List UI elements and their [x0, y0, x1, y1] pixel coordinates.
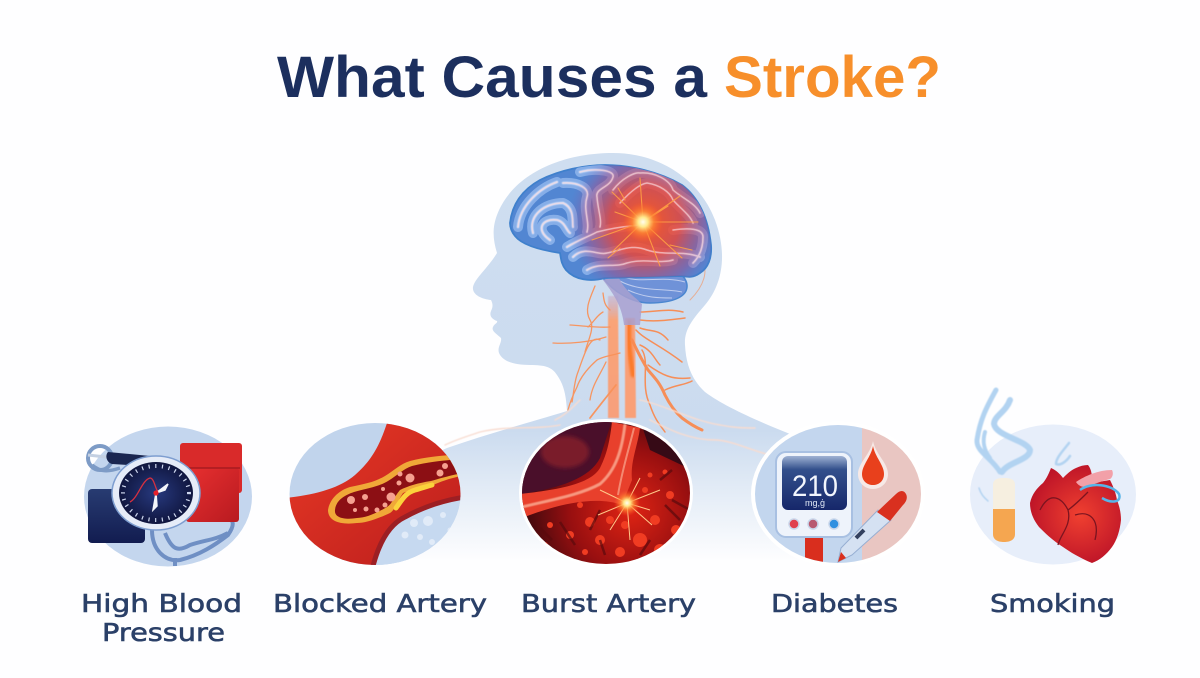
panel: burst artery — [519, 419, 693, 567]
lower blue area with bubbles — [372, 497, 465, 570]
label: smoking: Smoking — [990, 589, 1115, 618]
debris — [542, 470, 681, 557]
blood drop — [858, 441, 888, 489]
cerebrum — [510, 165, 711, 280]
cigarette — [993, 478, 1015, 542]
title: What Causes a — [277, 45, 708, 110]
label: high blood pressure: Pressure — [102, 618, 225, 647]
right branches — [632, 262, 705, 432]
white ring — [751, 421, 925, 567]
carotid arteries — [608, 296, 636, 418]
circle backdrop — [970, 424, 1136, 564]
head and shoulders silhouette — [375, 153, 838, 566]
brain folds — [513, 165, 711, 279]
label: blocked artery: Blocked Artery — [273, 589, 487, 618]
meter stem — [805, 538, 823, 562]
stroke glow — [623, 202, 663, 242]
lumen — [335, 460, 458, 519]
title: Stroke? — [724, 45, 941, 110]
glucose meter: mg,ģ — [805, 498, 825, 508]
panel: diabetes — [751, 425, 921, 563]
circle backdrop — [84, 426, 252, 566]
vessel — [520, 422, 640, 518]
glucose meter — [776, 452, 852, 537]
tubing — [88, 446, 233, 566]
heart — [1030, 465, 1121, 563]
label: diabetes: Diabetes — [771, 589, 898, 618]
cerebellum — [603, 263, 687, 303]
gauge dial — [112, 456, 200, 530]
backdrop split — [755, 425, 921, 563]
panel: smoking — [970, 390, 1136, 564]
upper blue — [290, 423, 460, 565]
pale lower branches — [445, 400, 770, 455]
label: burst artery: Burst Artery — [521, 589, 696, 618]
navy cuff — [88, 489, 145, 543]
glucose meter: 210 — [792, 470, 838, 503]
navy hose — [106, 452, 150, 466]
panel: blocked artery — [290, 423, 460, 565]
lancet pen — [838, 491, 907, 562]
brain — [509, 164, 712, 325]
red cuff — [180, 443, 242, 522]
burst illustration — [520, 420, 692, 566]
title — [277, 45, 941, 110]
bright plaque edge — [396, 485, 432, 508]
label: high blood pressure: High Blood — [81, 589, 242, 618]
brainstem — [603, 276, 642, 325]
rupture spark — [598, 478, 660, 540]
artery network in neck — [445, 262, 770, 455]
white ring — [519, 419, 693, 567]
plaque — [328, 455, 462, 524]
label: high blood pressure — [81, 589, 242, 647]
hot zone — [570, 165, 711, 279]
smoke — [977, 390, 1070, 501]
vessel wall — [290, 424, 460, 565]
panel: high blood pressure — [84, 426, 252, 566]
left branches — [553, 286, 620, 418]
